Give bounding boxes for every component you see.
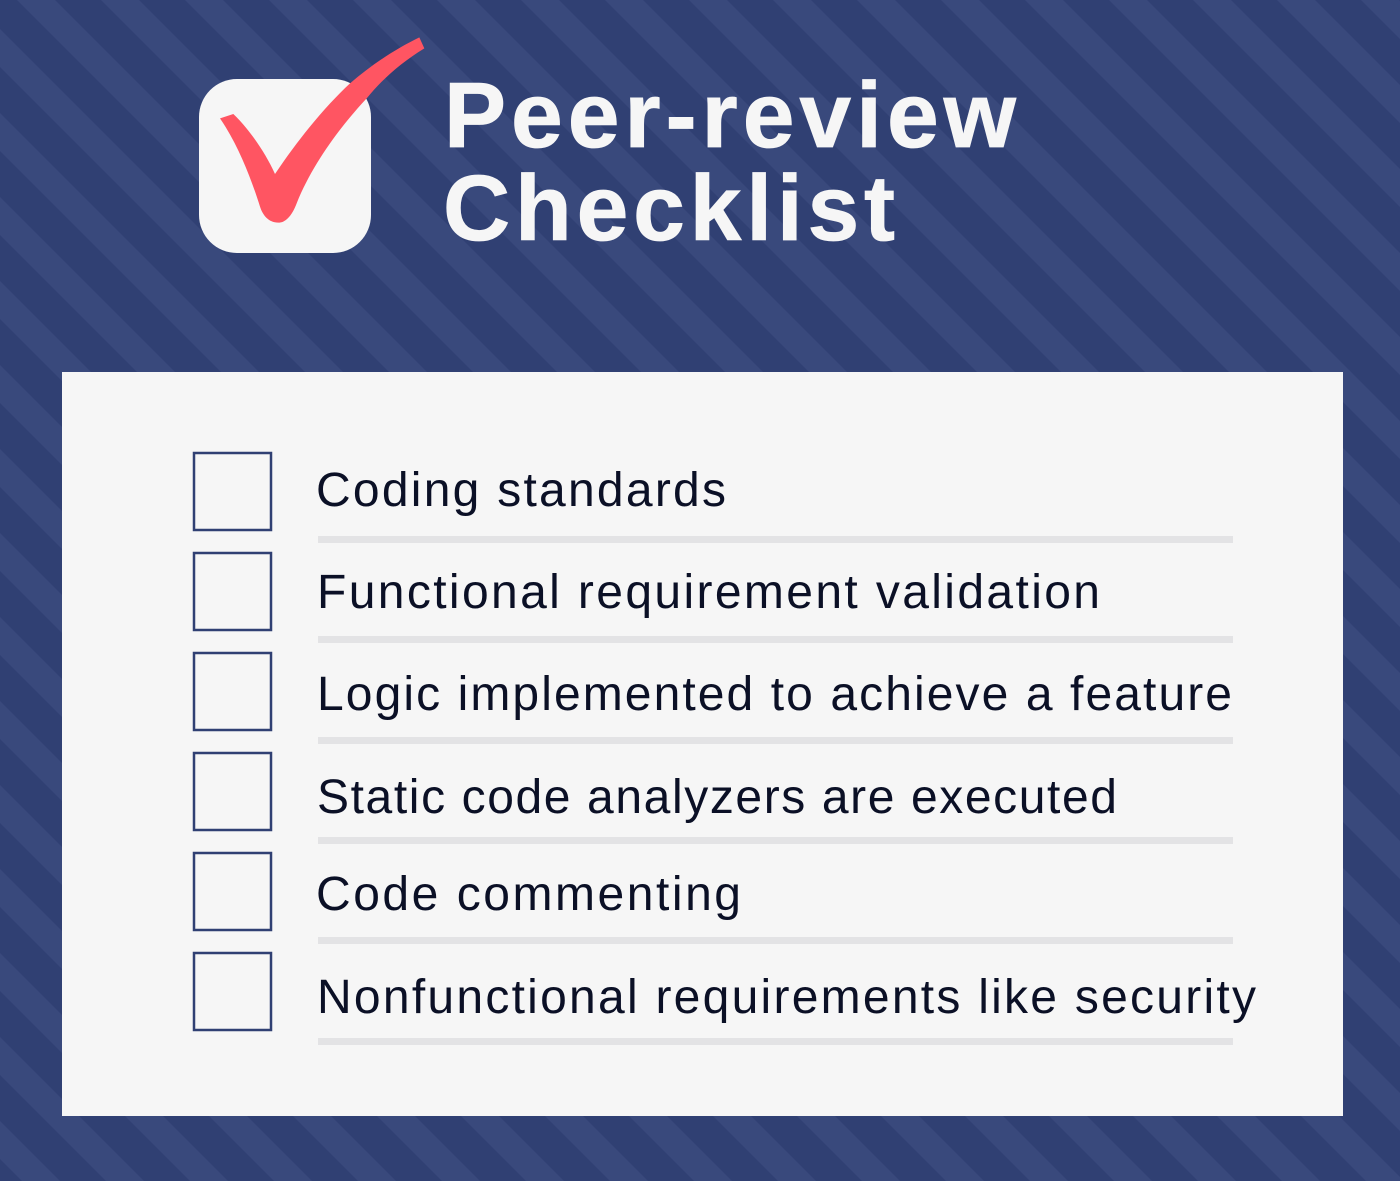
checklist item: Nonfunctional requirements like security: Nonfunctional requirements like security xyxy=(317,971,1256,1024)
checklist item: Code commenting: Code commenting xyxy=(316,868,741,921)
checklist item: Code commenting xyxy=(194,853,1233,944)
checklist item: Logic implemented to achieve a feature: Logic implemented to achieve a feature xyxy=(317,668,1232,721)
title: Peer-review xyxy=(444,63,1017,167)
title: Checklist xyxy=(443,156,895,260)
checklist item: Functional requirement validation: Functional requirement validation xyxy=(317,566,1100,619)
checklist item: Static code analyzers are executed: Static code analyzers are executed xyxy=(317,771,1117,824)
checklist item: Nonfunctional requirements like security xyxy=(194,953,1256,1045)
icon: rounded white square with red check mark xyxy=(199,37,424,253)
title xyxy=(443,63,1017,260)
checklist item: Functional requirement validation xyxy=(194,553,1233,643)
checklist item: Coding standards: Coding standards xyxy=(316,464,726,517)
checklist item: Coding standards xyxy=(194,453,1233,543)
checklist item: Logic implemented to achieve a feature xyxy=(194,653,1233,744)
checklist item: Static code analyzers are executed xyxy=(194,753,1233,844)
panel: checklist card xyxy=(62,372,1343,1116)
